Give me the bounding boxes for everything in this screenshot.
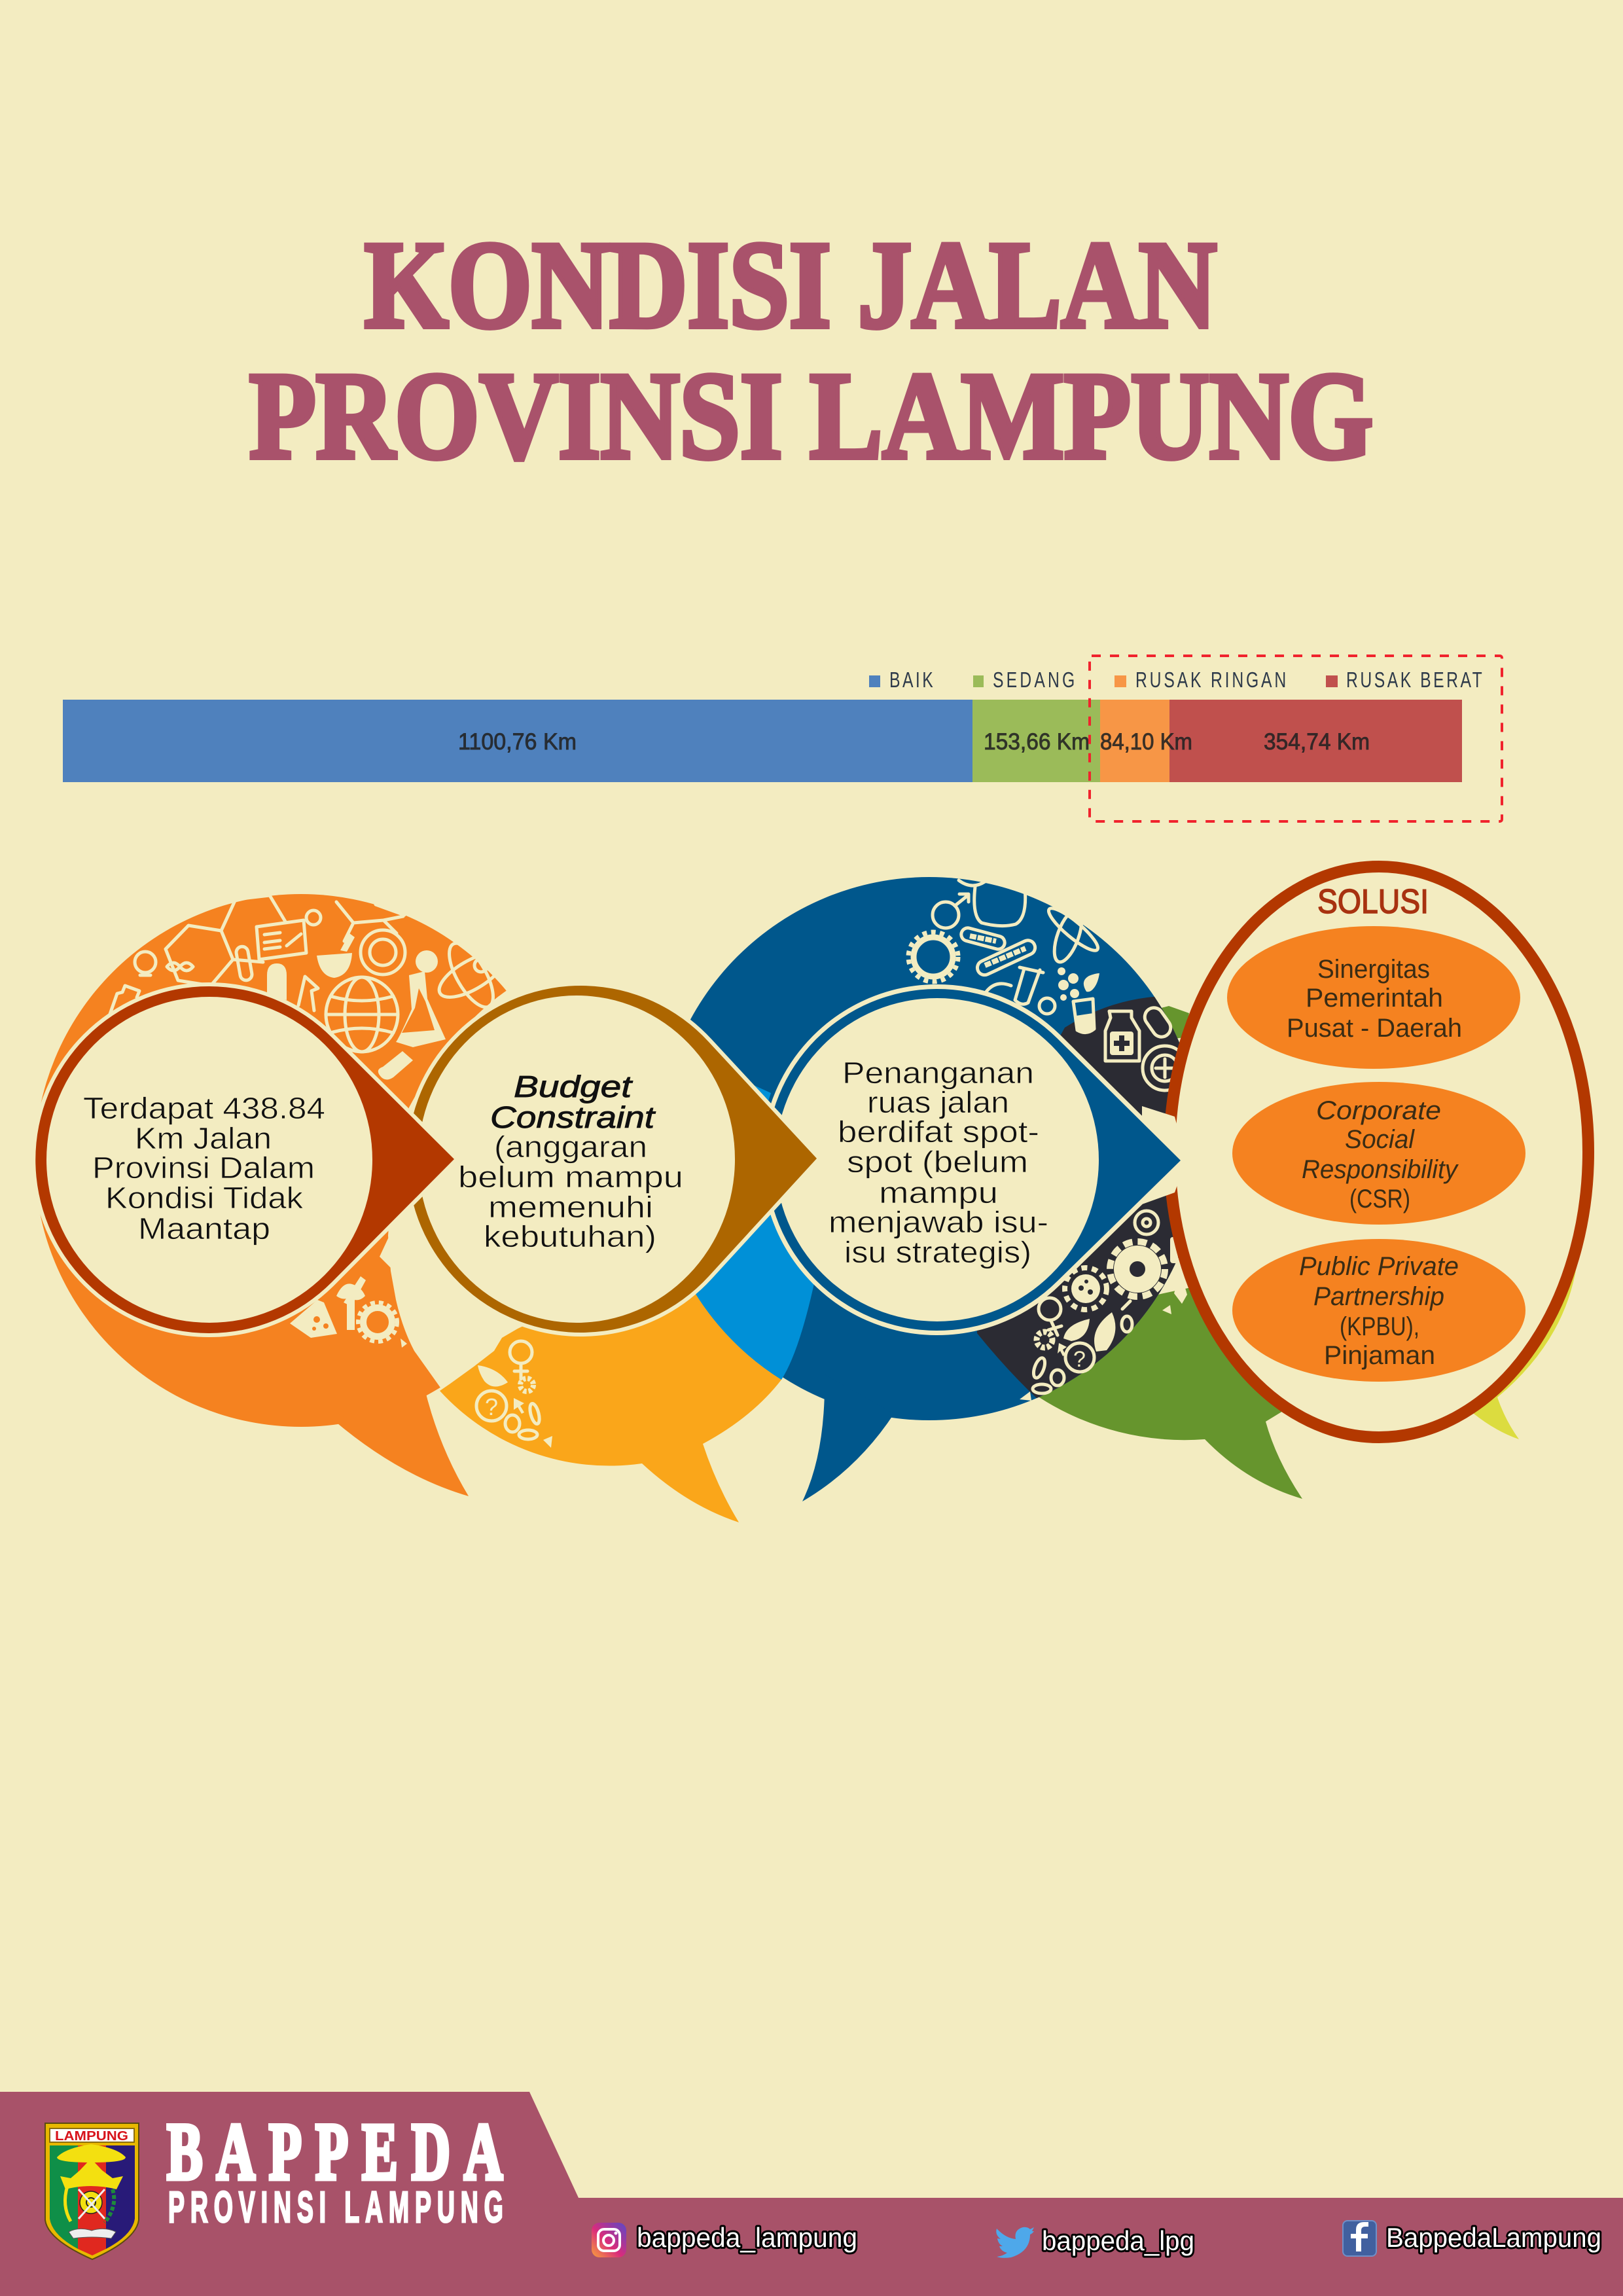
solution: kpbu: Public Private: [1299, 1252, 1459, 1281]
icons: orange bubble pattern: [108, 895, 510, 1348]
arrow circle 1: road condition statement: Provinsi Dalam: [92, 1151, 315, 1185]
icons: yellow bubble pattern: [476, 1341, 552, 1448]
dark blue speech bubble: [690, 877, 1179, 1501]
light blue segment: [687, 1178, 819, 1380]
logo: lampung shield: LAMPUNG: [55, 2129, 128, 2144]
icon: instagram: [592, 2223, 626, 2257]
icons: green bubble pattern: [1162, 1237, 1187, 1314]
solution: sinergitas: Pusat - Daerah: [1287, 1014, 1462, 1043]
background cut between orange and yellow bubbles: [388, 982, 720, 1401]
bar chart: road condition: 84,10 Km: [1100, 729, 1192, 755]
arrow circle 3: penanganan: berdifat spot-: [838, 1115, 1039, 1149]
chart legend: RUSAK BERAT: [1346, 669, 1482, 692]
chart legend: RUSAK RINGAN: [1135, 669, 1286, 692]
ring gap at blue arrow tip: [1142, 1106, 1186, 1204]
arrow circle 1: road condition statement: Km Jalan: [135, 1121, 272, 1155]
bar chart: road condition: 153,66 Km: [984, 729, 1090, 755]
arrow circle 1: road condition statement: [35, 986, 454, 1333]
facebook handle: BappedaLampung: [1386, 2222, 1601, 2253]
arrow circle 1: road condition statement: Maantap: [138, 1211, 270, 1246]
arrow circle 3: penanganan: Penanganan: [842, 1056, 1034, 1090]
arrow circle 3: penanganan: mampu: [879, 1175, 998, 1210]
solution: csr: [1232, 1082, 1525, 1225]
arrow circle 1: road condition statement: Terdapat 438.84: [83, 1091, 325, 1125]
chart legend: BAIK: [889, 669, 933, 692]
icons: blue bubble pattern: [908, 880, 1187, 1401]
bar chart: road condition: 354,74 Km: [1264, 729, 1370, 755]
brand: bappeda: BAPPEDA: [167, 2106, 516, 2197]
arrow circle 2: budget constraint: Budget: [514, 1069, 633, 1103]
title: PROVINSI LAMPUNG: [249, 348, 1373, 485]
chart legend: [869, 669, 1482, 692]
arrow circle 1: road condition statement: Kondisi Tidak: [105, 1181, 304, 1215]
solution: kpbu: [1232, 1239, 1525, 1382]
solution: sinergitas: Sinergitas: [1317, 955, 1430, 984]
solution: csr: Corporate: [1316, 1096, 1441, 1125]
arrow circle 2: budget constraint: memenuhi: [488, 1190, 653, 1224]
arrow circle 2: budget constraint: kebutuhan): [484, 1219, 656, 1253]
orange speech bubble: [35, 894, 567, 1496]
arrow circle 3: penanganan: spot (belum: [847, 1145, 1028, 1179]
arrow circle 3: penanganan: [766, 989, 1181, 1331]
arrow circle 2: budget constraint: belum mampu: [458, 1160, 683, 1194]
solution: csr: Responsibility: [1302, 1155, 1459, 1184]
instagram handle: bappeda_lampung: [637, 2222, 857, 2253]
chart legend: SEDANG: [993, 669, 1075, 692]
yellow speech bubble: [440, 1244, 805, 1522]
icon: facebook: [1343, 2221, 1376, 2256]
solution: csr: (CSR): [1349, 1185, 1410, 1213]
title: [249, 217, 1373, 485]
twitter handle: bappeda_lpg: [1042, 2225, 1194, 2256]
panel: solusi: [1169, 867, 1588, 1437]
arrow circle 3: penanganan: isu strategis): [844, 1235, 1031, 1269]
solution: kpbu: Partnership: [1313, 1282, 1444, 1311]
bar chart: road condition: [63, 700, 1462, 782]
icons: yellow bubble pattern: ?: [485, 1393, 498, 1420]
solution: csr: Social: [1345, 1125, 1415, 1154]
arrow circle 2: budget constraint: (anggaran: [494, 1130, 647, 1164]
arrow circle 3: penanganan: ruas jalan: [867, 1085, 1009, 1119]
arrow circle 3: penanganan: menjawab isu-: [829, 1205, 1048, 1239]
green speech bubble: [982, 1006, 1302, 1499]
dashed highlight box: [1090, 656, 1502, 821]
solution: kpbu: Pinjaman: [1324, 1341, 1435, 1370]
solution: sinergitas: Pemerintah: [1306, 984, 1443, 1013]
heading: solusi: SOLUSI: [1317, 883, 1429, 921]
lime speech bubble: [1466, 1266, 1577, 1439]
bar chart: road condition: 1100,76 Km: [458, 729, 577, 755]
icons: blue bubble pattern: ?: [1073, 1347, 1086, 1372]
brand: bappeda: PROVINSI LAMPUNG: [168, 2183, 503, 2232]
icon: twitter: [996, 2227, 1034, 2258]
footer band: [0, 2092, 1623, 2296]
logo: lampung shield: [45, 2123, 139, 2259]
dark segment: [977, 997, 1179, 1398]
arrow circle 2: budget constraint: Constraint: [490, 1100, 656, 1134]
solution: kpbu: (KPBU),: [1340, 1312, 1419, 1341]
arrow circle 2: budget constraint: [408, 986, 817, 1333]
solution: sinergitas: [1227, 926, 1520, 1069]
title: KONDISI JALAN: [365, 217, 1217, 354]
